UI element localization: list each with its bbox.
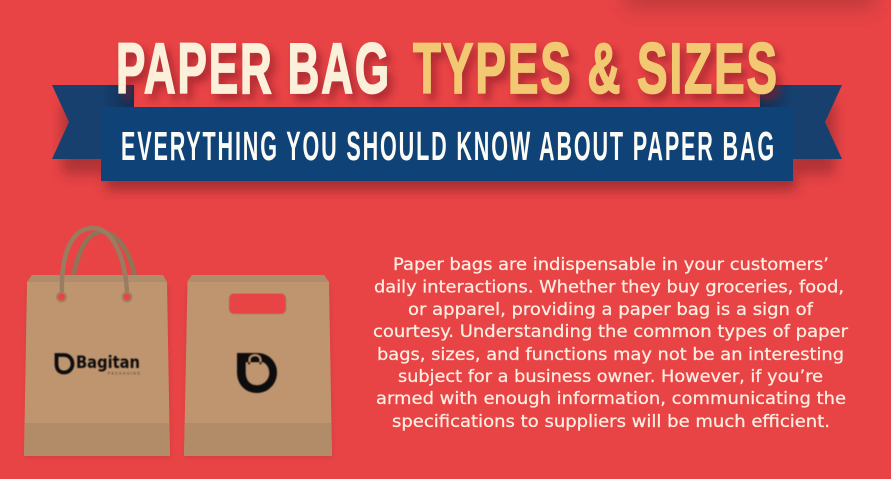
intro paragraph: Paper bags are indispensable in your customers’ <box>393 255 829 274</box>
back flap <box>27 275 167 282</box>
bag body <box>184 282 332 456</box>
logo tagline: PACKAGING <box>108 372 140 376</box>
bottom fold <box>184 423 332 456</box>
die-cut handle <box>229 294 286 314</box>
ribbon tail right <box>760 85 842 174</box>
bag with rope handles <box>24 228 171 458</box>
intro paragraph: armed with enough information, communicating the <box>376 389 846 408</box>
top right shadow <box>625 0 875 8</box>
front rope handle <box>62 228 127 292</box>
bag shadow <box>185 286 333 458</box>
hole right <box>122 292 132 302</box>
intro paragraph: specifications to suppliers will be much efficient. <box>392 412 830 431</box>
bag body <box>24 282 170 456</box>
bagitan logo <box>56 353 140 376</box>
intro paragraph: subject for a business owner. However, if you’re <box>398 367 823 386</box>
hole left <box>57 292 66 302</box>
banner bar <box>101 107 796 190</box>
ribbon tail left <box>52 85 134 174</box>
d logo <box>237 353 277 393</box>
intro paragraph: or apparel, providing a paper bag is a sign of <box>408 300 814 319</box>
bottom fold <box>24 423 170 456</box>
logo wordmark: Bagitan <box>76 353 140 373</box>
logo mark <box>56 355 72 372</box>
intro paragraph: courtesy. Understanding the common types of paper <box>373 322 848 341</box>
title shadow: PAPER BAG <box>121 36 396 115</box>
title shadow <box>121 36 784 115</box>
intro paragraph <box>373 255 848 431</box>
intro paragraph: daily interactions. Whether they buy groceries, food, <box>374 278 844 296</box>
back rope handle <box>73 232 135 277</box>
back flap <box>187 275 329 282</box>
intro paragraph: bags, sizes, and functions may not be an interesting <box>377 345 844 364</box>
bag with die-cut handle <box>184 275 333 458</box>
bag shadow <box>25 286 171 458</box>
title: paper bag: PAPER BAG <box>116 30 391 109</box>
header banner <box>52 30 842 190</box>
